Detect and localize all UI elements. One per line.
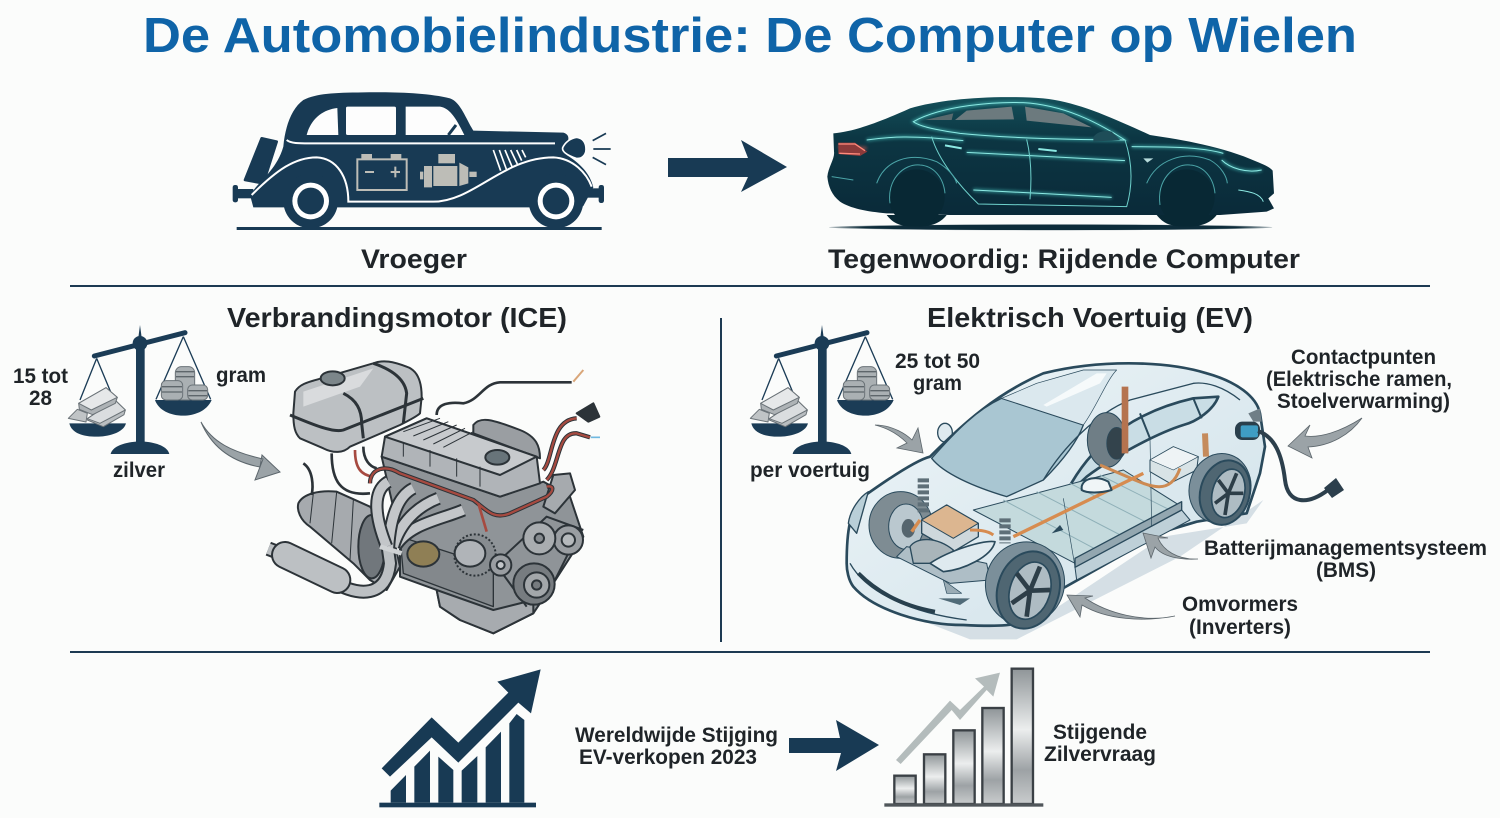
label: inverters: Omvormers — [1182, 593, 1298, 616]
label: inverters — [1182, 593, 1298, 639]
silver quantity ICE — [13, 364, 266, 482]
heading: ICE: Verbrandingsmotor (ICE) — [227, 302, 567, 333]
silver quantity ICE: gram — [216, 364, 266, 387]
label: silver demand — [1044, 721, 1156, 766]
caption: today: Tegenwoordig: Rijdende Computer — [828, 244, 1301, 274]
caption: before: Vroeger — [361, 244, 468, 274]
label: inverters: (Inverters) — [1189, 616, 1291, 639]
icon: silver demand bar chart — [884, 669, 1043, 807]
label: contact points: Contactpunten — [1291, 346, 1436, 369]
label: BMS: Batterijmanagementsysteem — [1204, 537, 1487, 560]
title: De Automobielindustrie: De Computer op Wielen — [143, 9, 1357, 63]
icon: charging plug — [1324, 478, 1344, 498]
arrow: sales to silver demand — [789, 720, 879, 771]
label: contact points — [1266, 346, 1452, 413]
arrow: to EV hood — [875, 425, 923, 453]
icon: EV sales growth chart — [379, 669, 541, 807]
silver quantity ICE: 15 tot — [13, 365, 68, 388]
label: contact points: Stoelverwarming) — [1277, 390, 1450, 413]
heading: EV: Elektrisch Voertuig (EV) — [927, 302, 1253, 333]
label: global sales: Wereldwijde Stijging — [575, 724, 778, 747]
label: BMS: (BMS) — [1316, 559, 1376, 582]
label: contact points: (Elektrische ramen, — [1266, 368, 1452, 391]
silver quantity ICE: 28 — [29, 387, 52, 410]
divider top — [70, 285, 1430, 287]
icon: balance scale ICE — [68, 325, 212, 454]
label: global sales — [575, 724, 778, 769]
arrow: scale to engine — [201, 422, 280, 480]
silver quantity EV: gram — [913, 372, 962, 395]
label: silver demand: Zilvervraag — [1044, 743, 1156, 766]
icon: balance scale EV — [750, 325, 894, 454]
arrow: to inverters — [1067, 595, 1175, 619]
silver quantity EV: 25 tot 50 — [895, 350, 980, 373]
label: silver demand: Stijgende — [1053, 721, 1147, 744]
illustration: electric vehicle cutaway — [847, 363, 1265, 639]
charging cable — [1258, 431, 1328, 500]
label: BMS — [1204, 537, 1487, 582]
silver quantity ICE: zilver — [113, 459, 165, 482]
silver quantity EV: per voertuig — [750, 459, 870, 482]
illustration: modern electric car — [827, 97, 1274, 230]
silver quantity EV — [750, 350, 980, 482]
divider bottom — [70, 651, 1430, 653]
arrow: to battery — [1143, 533, 1198, 559]
arrow: old to new — [668, 140, 787, 192]
illustration: combustion engine — [268, 361, 600, 633]
label: global sales: EV-verkopen 2023 — [579, 746, 757, 769]
divider vertical — [720, 318, 722, 642]
illustration: vintage car — [233, 92, 611, 230]
arrow: to charge port — [1288, 418, 1362, 458]
